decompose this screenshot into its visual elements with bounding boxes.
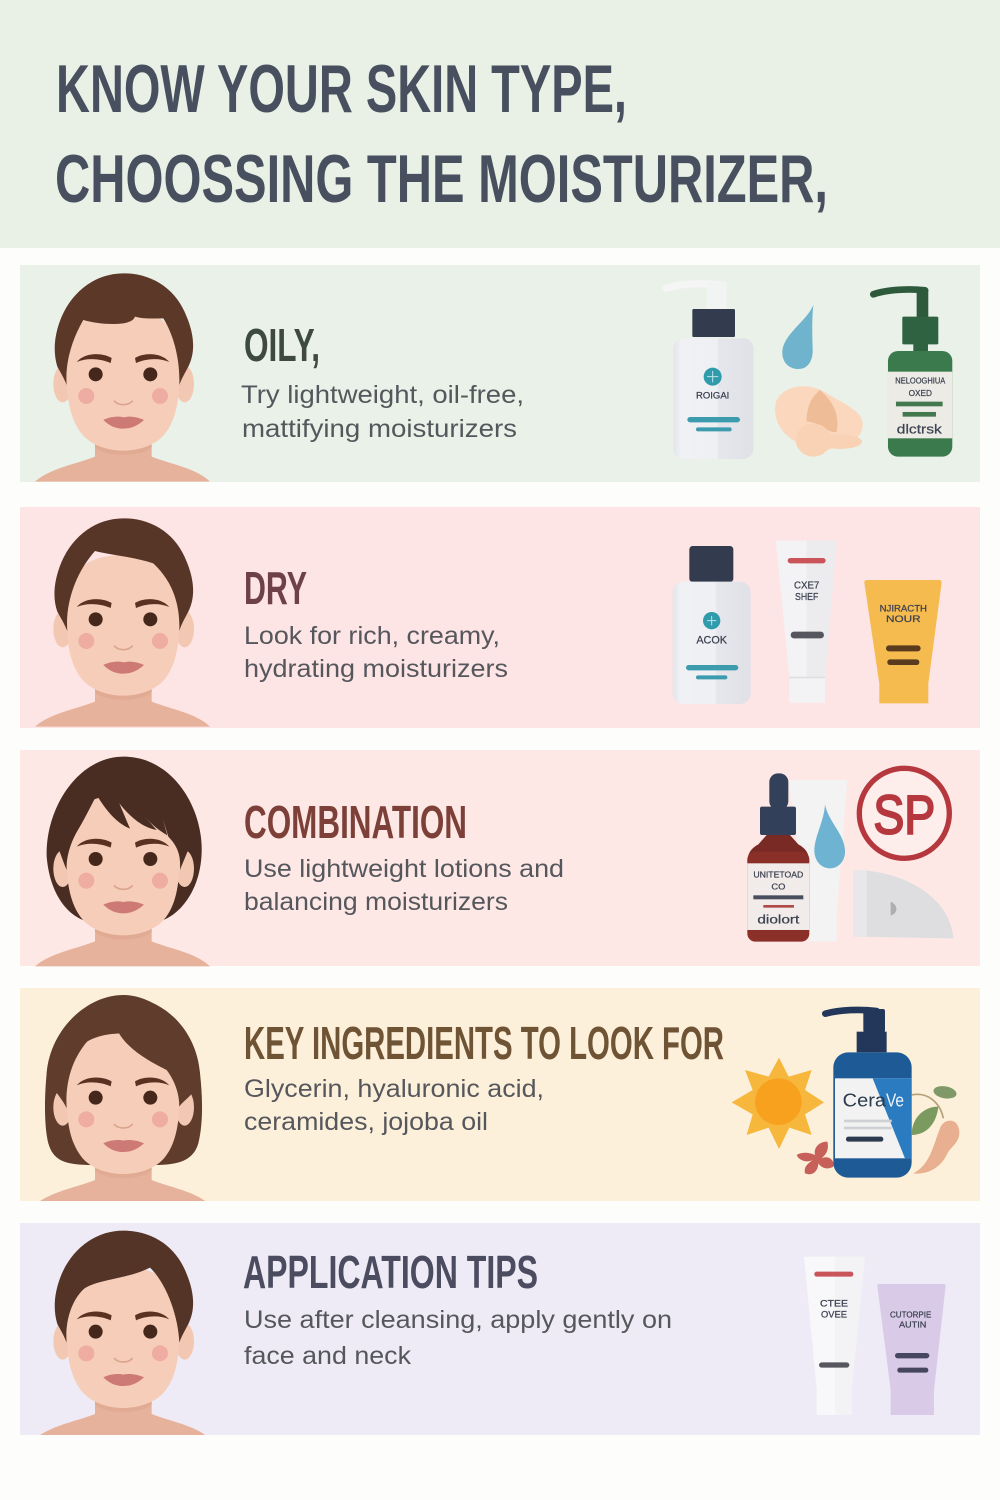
products: application tips (804, 1257, 946, 1415)
portrait: application tips (35, 1231, 210, 1439)
portrait: dry skin (35, 518, 210, 727)
icon: sponge pads (775, 386, 863, 457)
text: oily advice (241, 381, 524, 443)
icon: green pump bottle: OXED (909, 388, 932, 398)
icon: yellow tube (864, 580, 942, 703)
heading: dry: DRY (244, 562, 307, 614)
icon: dropper bottle: diolort (757, 912, 800, 926)
heading: oily: OILY, (244, 319, 320, 371)
panel: combination (20, 750, 980, 966)
text: application advice (244, 1306, 672, 1370)
icon: white bottle: ACOK (696, 634, 727, 646)
icon: CeraVe pump bottle: Cera (843, 1090, 887, 1111)
icon: white tube: OVEE (821, 1309, 847, 1319)
icon: white tube (776, 541, 837, 703)
icon: purple tube: AUTIN (899, 1320, 926, 1330)
icon: white tube (804, 1257, 865, 1415)
title (55, 51, 828, 217)
icon: water drop (814, 804, 845, 868)
icon: SP badge (859, 768, 949, 858)
icon: yellow tube: NJIRACTH (880, 603, 927, 613)
text: combination advice: balancing moisturizers (244, 888, 508, 916)
heading: combination: COMBINATION (244, 796, 467, 848)
icon: white tube: CXE7 (794, 581, 820, 592)
text: ingredients list: ceramides, jojoba oil (244, 1108, 488, 1136)
icon: red flower (797, 1142, 834, 1174)
heading: application tips: APPLICATION TIPS (243, 1246, 538, 1298)
icon: green pump bottle (873, 288, 952, 457)
portrait: combination skin (35, 757, 210, 966)
text: combination advice (244, 855, 564, 916)
text: dry advice: Look for rich, creamy, (244, 622, 500, 650)
text: ingredients list (244, 1075, 544, 1136)
icon: water drop (782, 305, 813, 369)
portrait: key ingredients (35, 995, 210, 1205)
icon: purple tube (877, 1284, 946, 1415)
icon: white tube: CTEE (820, 1298, 848, 1308)
text: oily advice: mattifying moisturizers (242, 415, 517, 443)
products: key ingredients (732, 1009, 959, 1178)
products: dry (673, 541, 942, 704)
icon: yellow tube: NOUR (886, 614, 921, 624)
icon: sun (732, 1058, 824, 1149)
text: ingredients list: Glycerin, hyaluronic acid, (244, 1075, 544, 1103)
portrait: oily skin (35, 273, 210, 482)
icon: grey applicator (853, 870, 953, 938)
icon: dropper bottle: UNITETOAD (753, 869, 803, 879)
panel: oily (20, 265, 980, 482)
heading: key ingredients: KEY INGREDIENTS TO LOOK FOR (244, 1017, 724, 1069)
icon: green pump bottle: dlctrsk (897, 423, 943, 437)
panel: dry (20, 507, 980, 728)
title: KNOW YOUR SKIN TYPE, (56, 51, 627, 127)
text: dry advice: hydrating moisturizers (244, 655, 508, 683)
icon: white bottle (673, 546, 751, 704)
icon: SP badge: SP (873, 784, 935, 846)
text: combination advice: Use lightweight lotions and (244, 855, 564, 883)
panel: application tips (20, 1223, 980, 1439)
panel: key ingredients (20, 988, 980, 1205)
text: application advice: Use after cleansing, apply gently on (244, 1306, 672, 1334)
icon: dropper bottle (747, 773, 809, 942)
icon: white pump bottle: ROIGAI (696, 390, 729, 400)
text: application advice: face and neck (244, 1342, 412, 1370)
icon: white pump bottle (666, 282, 753, 459)
icon: white tube behind (788, 780, 847, 942)
icon: white tube: SHEF (795, 592, 818, 603)
icon: purple tube: CUTORPIE (890, 1309, 932, 1319)
icon: CeraVe pump bottle: Ve (886, 1090, 904, 1111)
products: combination (747, 768, 953, 942)
header band (0, 0, 1000, 248)
text: dry advice (244, 622, 508, 683)
icon: dropper bottle: CO (771, 881, 786, 891)
icon: CeraVe pump bottle (825, 1009, 912, 1178)
icon: green pump bottle: NELOOGHIUA (895, 376, 945, 386)
icon: botanical sprig (912, 1084, 959, 1174)
text: oily advice: Try lightweight, oil-free, (241, 381, 524, 409)
products: oily (666, 282, 952, 459)
